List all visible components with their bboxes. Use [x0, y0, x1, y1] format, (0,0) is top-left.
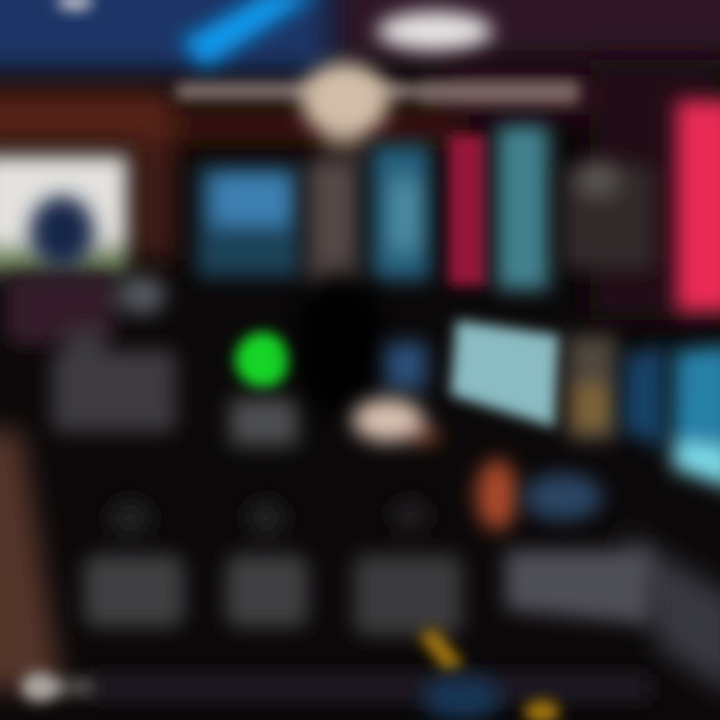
panel: small blue monitor: [385, 342, 427, 390]
icon: green circle: [235, 332, 291, 388]
heading: blurred sign text: [175, 80, 580, 104]
panel: pink-red banner: [676, 100, 720, 312]
panel: dark gray text panel: [562, 160, 654, 270]
ceiling light: blue streak: [180, 0, 320, 68]
icon: orange marker: [476, 459, 518, 531]
footer: white spot: [21, 672, 94, 702]
ceiling lamp: beige globe: [301, 62, 389, 160]
panel: blue monitor: [622, 345, 665, 450]
panel: blue screen: [197, 165, 300, 277]
panel: gray block bottom 3: [354, 499, 462, 635]
person silhouette: [5, 196, 166, 345]
panel: orange-gray monitor: [567, 335, 617, 440]
wall band: reddish brown: [0, 60, 720, 320]
panel: teal screen: [372, 145, 430, 280]
panel: cyan monitor right: [672, 345, 720, 490]
panel: gray block under green circle: [230, 398, 298, 446]
papers: white-orange glow: [352, 398, 441, 444]
panel: light cyan monitor: [450, 320, 560, 428]
icon: blue marker: [422, 676, 502, 720]
panel: blue-gray keyboard: [523, 473, 603, 521]
left window: [0, 155, 128, 273]
panel: red banner: [448, 134, 486, 286]
panel: gray block upper left: [52, 328, 176, 432]
panel: gray column: [308, 160, 358, 285]
footer: gray strip: [90, 674, 650, 700]
panel: teal banner: [497, 125, 549, 290]
dark figure: [296, 273, 384, 417]
floor: brown left edge: [0, 430, 62, 690]
panel: gray block bottom 1: [84, 500, 184, 627]
panel: gray block bottom 4: [505, 550, 650, 625]
panel: gray block bottom 2: [226, 500, 308, 627]
icon: yellow marker: [418, 628, 465, 672]
ceiling: navy and maroon: [0, 0, 720, 72]
icon: yellow marker bottom: [524, 700, 560, 720]
ceiling light: white oval: [377, 11, 493, 51]
ceiling light: small white spot: [57, 0, 93, 11]
desk: gray diagonal right: [620, 530, 720, 700]
